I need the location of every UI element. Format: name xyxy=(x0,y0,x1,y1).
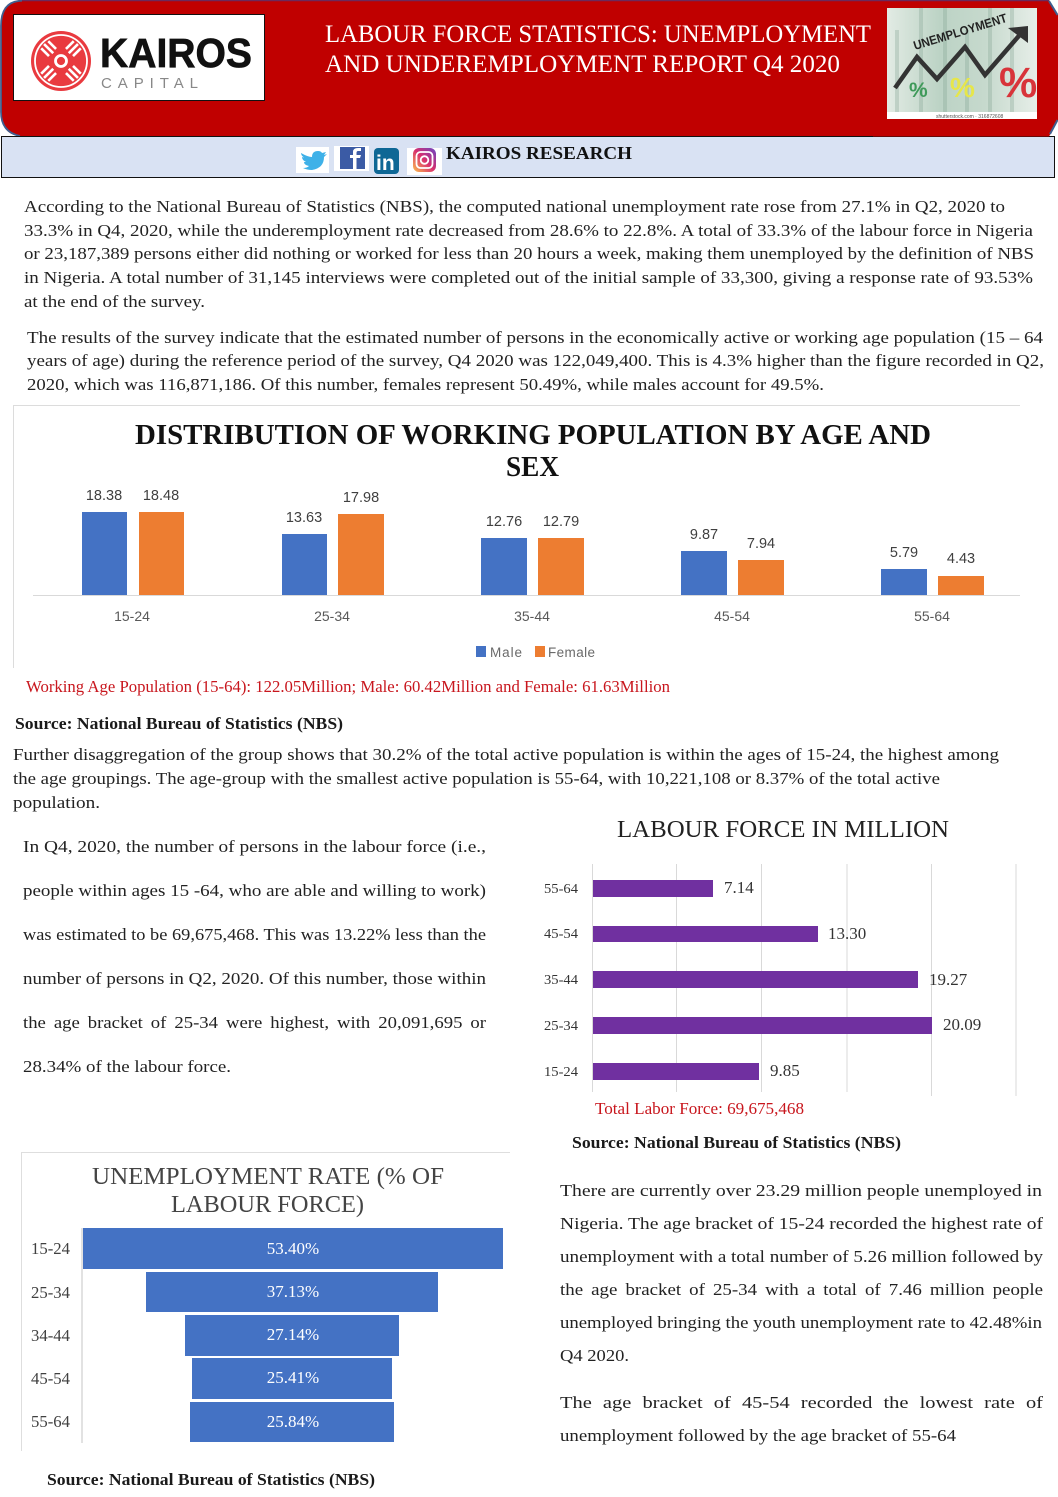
category axis labels: 55-64 xyxy=(914,608,950,624)
logo subtitle: CAPITAL xyxy=(101,75,198,92)
category axis labels: 25-34 xyxy=(314,608,350,624)
unemployment paragraph: the age bracket of 25-34 with a total of 7.46 million people xyxy=(560,1280,1043,1299)
working age population note: Working Age Population (15-64): 122.05Million; Male: 60.42Million and Female: 61.63Million xyxy=(26,677,670,696)
panel: working population bar chart xyxy=(14,406,1020,668)
unemployment picture: % xyxy=(909,79,928,102)
bar value labels: 18.48 xyxy=(143,488,179,504)
unemployment paragraph: Nigeria. The age bracket of 15-24 recorded the highest rate of xyxy=(560,1214,1043,1233)
labour force paragraph: the age bracket of 25-34 were highest, with 20,091,695 or xyxy=(23,1013,486,1032)
icon: linkedin xyxy=(374,148,399,175)
icon: twitter xyxy=(296,147,329,173)
category labels: 15-24 xyxy=(31,1239,70,1258)
unemployment picture: UNEMPLOYMENT xyxy=(912,11,1009,53)
bar value labels: 19.27 xyxy=(929,970,968,989)
bar value labels: 9.85 xyxy=(770,1061,800,1080)
bar value labels: 9.87 xyxy=(690,527,718,543)
bar value labels: 7.94 xyxy=(747,536,775,552)
funnel value labels: 37.13% xyxy=(267,1282,319,1301)
intro paragraph: at the end of the survey. xyxy=(24,292,205,311)
funnel bars xyxy=(83,1228,503,1442)
survey results paragraph: years of age) during the reference period of the survey, Q4 2020 was 122,049,400. This is 4.3% higher than the figure recorded in Q2, xyxy=(27,351,1044,370)
category labels: 55-64 xyxy=(31,1412,70,1431)
intro paragraph: According to the National Bureau of Statistics (NBS), the computed national unemployment rate rose from 27.1% in Q2, 2020 to xyxy=(24,197,1005,216)
legend: Male xyxy=(490,645,522,660)
icon: instagram xyxy=(407,148,442,175)
bar value labels: 17.98 xyxy=(343,490,379,506)
female bars xyxy=(139,512,984,595)
intro paragraph: 33.3% in Q4, 2020, while the underemployment rate decreased from 28.6% to 22.8%. A total of 33.3% of the labour force in Nigeria xyxy=(24,221,1033,240)
labour force paragraph: people within ages 15 -64, who are able and willing to work) xyxy=(23,881,486,900)
unemployment picture: shutterstock.com · 316872608 xyxy=(936,114,1003,120)
unemployment paragraph: There are currently over 23.29 million people unemployed in xyxy=(560,1181,1043,1200)
panel: unemployment rate funnel chart xyxy=(22,1152,510,1451)
social band xyxy=(2,130,1054,178)
category labels: 25-34 xyxy=(31,1283,70,1302)
source line: Source: National Bureau of Statistics (NBS) xyxy=(15,714,343,733)
bar value labels: 12.76 xyxy=(486,514,522,530)
category labels: 45-54 xyxy=(544,927,578,942)
intro paragraph: or 23,187,389 persons either did nothing or worked for less than 20 hours a week, making them unemployed by the definition of NBS xyxy=(24,244,1034,263)
labour force paragraph: number of persons in Q2, 2020. Of this number, those within xyxy=(23,969,487,988)
unemployment paragraph: Q4 2020. xyxy=(560,1346,629,1365)
lowest rate paragraph xyxy=(560,1393,1043,1445)
unemployment paragraph xyxy=(560,1181,1044,1365)
labour force paragraph xyxy=(23,837,487,1076)
unemployment paragraph: unemployment with a total number of 5.26 million followed by xyxy=(560,1247,1044,1266)
logo wordmark: KAIROS xyxy=(100,30,252,76)
disaggregation paragraph xyxy=(13,745,1000,812)
source line: Source: National Bureau of Statistics (NBS) xyxy=(47,1470,375,1489)
chart title: SEX xyxy=(506,452,559,483)
survey results paragraph xyxy=(27,328,1044,394)
chart title: LABOUR FORCE IN MILLION xyxy=(617,817,949,843)
bar value labels: 7.14 xyxy=(724,878,754,897)
title: LABOUR FORCE STATISTICS: UNEMPLOYMENT xyxy=(325,21,871,48)
icon: facebook xyxy=(334,146,369,171)
disaggregation paragraph: the age groupings. The age-group with the smallest active population is 55-64, with 10,221,108 or 8.37% of the total active xyxy=(13,769,940,788)
title: AND UNDEREMPLOYMENT REPORT Q4 2020 xyxy=(325,51,840,78)
bar value labels: 13.30 xyxy=(828,924,866,943)
total labour force note: Total Labor Force: 69,675,468 xyxy=(595,1099,804,1118)
header banner xyxy=(1,0,1058,136)
labour force paragraph: In Q4, 2020, the number of persons in the labour force (i.e., xyxy=(23,837,486,856)
category axis labels: 35-44 xyxy=(514,608,550,624)
panel: labour force bar chart xyxy=(544,817,1016,1096)
intro paragraph: in Nigeria. A total number of 31,145 interviews were completed out of the initial sample of 33,300, giving a response rate of 93.53% xyxy=(24,268,1033,287)
icon: Kairos emblem xyxy=(31,31,91,91)
funnel value labels: 25.41% xyxy=(267,1368,319,1387)
category labels: 15-24 xyxy=(544,1065,578,1080)
lowest rate paragraph: The age bracket of 45-54 recorded the lowest rate of xyxy=(560,1393,1043,1412)
logo box xyxy=(14,14,264,100)
bar value labels: 13.63 xyxy=(286,510,322,526)
survey results paragraph: The results of the survey indicate that the estimated number of persons in the economically active or working age population (15 – 64 xyxy=(27,328,1044,347)
band label: KAIROS RESEARCH xyxy=(446,143,632,163)
category labels: 35-44 xyxy=(544,973,578,988)
bar value labels xyxy=(86,488,975,567)
lowest rate paragraph: unemployment followed by the age bracket of 55-64 xyxy=(560,1426,957,1445)
disaggregation paragraph: population. xyxy=(13,793,100,812)
title xyxy=(325,21,871,78)
bar value labels xyxy=(724,878,981,1080)
bar value labels: 20.09 xyxy=(943,1015,981,1034)
survey results paragraph: 2020, which was 116,871,186. Of this number, females represent 50.49%, while males account for 49.5%. xyxy=(27,375,824,394)
icon: linkedin: in xyxy=(376,152,395,175)
funnel value labels: 53.40% xyxy=(267,1239,319,1258)
disaggregation paragraph: Further disaggregation of the group shows that 30.2% of the total active population is within the ages of 15-24, the highest among xyxy=(13,745,1000,764)
category axis labels xyxy=(114,608,950,624)
unemployment picture xyxy=(887,8,1037,120)
chart title xyxy=(135,420,931,483)
category labels: 45-54 xyxy=(31,1369,70,1388)
unemployment picture: % xyxy=(950,72,975,103)
legend xyxy=(476,645,595,660)
legend: Female xyxy=(548,645,595,660)
category labels: 25-34 xyxy=(544,1019,578,1034)
bar value labels: 12.79 xyxy=(543,514,579,530)
chart title: LABOUR FORCE) xyxy=(171,1192,364,1218)
category labels xyxy=(31,1239,70,1431)
category axis labels: 45-54 xyxy=(714,608,750,624)
intro paragraph xyxy=(24,197,1034,311)
labour force paragraph: was estimated to be 69,675,468. This was 13.22% less than the xyxy=(23,925,486,944)
funnel value labels: 27.14% xyxy=(267,1325,319,1344)
chart title xyxy=(92,1164,444,1218)
category labels: 34-44 xyxy=(31,1326,70,1345)
chart title: UNEMPLOYMENT RATE (% OF xyxy=(92,1164,444,1190)
category labels: 55-64 xyxy=(544,882,578,897)
bar value labels: 4.43 xyxy=(947,551,975,567)
chart title: DISTRIBUTION OF WORKING POPULATION BY AGE AND xyxy=(135,420,931,451)
purple bars xyxy=(593,880,932,1080)
unemployment picture: % xyxy=(999,59,1037,107)
unemployment paragraph: unemployed bringing the youth unemployment rate to 42.48%in xyxy=(560,1313,1043,1332)
source line: Source: National Bureau of Statistics (NBS) xyxy=(572,1133,901,1152)
category labels xyxy=(544,882,578,1080)
funnel value labels xyxy=(267,1239,319,1431)
male bars xyxy=(82,512,927,595)
bar value labels: 5.79 xyxy=(890,545,918,561)
labour force paragraph: 28.34% of the labour force. xyxy=(23,1057,231,1076)
funnel value labels: 25.84% xyxy=(267,1412,319,1431)
category axis labels: 15-24 xyxy=(114,608,150,624)
bar value labels: 18.38 xyxy=(86,488,122,504)
